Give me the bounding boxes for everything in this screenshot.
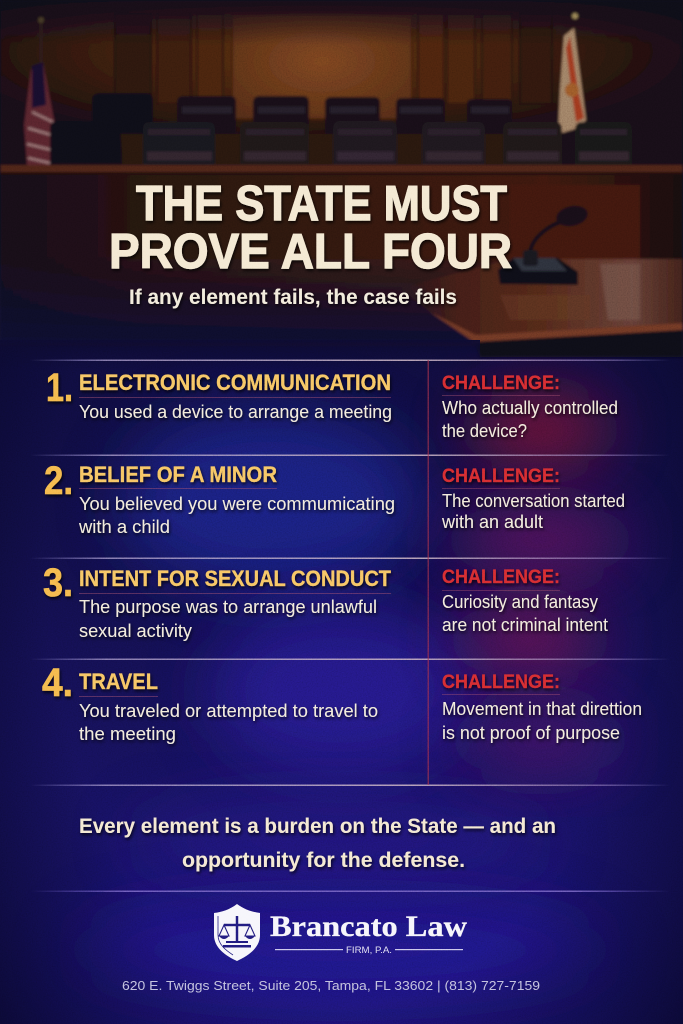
row 3: intent for sexual conduct [43, 561, 391, 641]
blend below photo into navy [0, 340, 480, 370]
row 4 challenge [442, 671, 642, 743]
row 2 challenge: CHALLENGE: [442, 465, 560, 487]
row 3 challenge [442, 566, 608, 635]
firm logo wordmark: Brancato Law [270, 910, 467, 943]
row 2: belief of a minor: 2. [44, 459, 73, 503]
low wood bar behind front chairs [120, 134, 560, 164]
row 2 challenge: with an adult [441, 511, 543, 532]
row 4 challenge: is not proof of purpose [442, 722, 620, 743]
icon: shield with scales [214, 904, 260, 961]
row 4 challenge: CHALLENGE: [442, 671, 560, 693]
courtroom photo illustration [0, 0, 683, 357]
row 3 challenge: CHALLENGE: [442, 566, 560, 588]
row 4: travel: the meeting [79, 723, 176, 744]
row 2: belief of a minor: You believed you were commumicating [79, 493, 395, 514]
row 1 challenge: the device? [442, 420, 527, 441]
row 3 challenge: are not criminal intent [442, 614, 608, 635]
row 1 challenge: Who actually controlled [442, 397, 618, 418]
closing statement [79, 814, 556, 872]
row 3: intent for sexual conduct: The purpose was to arrange unlawful [79, 596, 377, 617]
row 3: intent for sexual conduct: INTENT FOR SEXUAL CONDUCT [79, 566, 391, 591]
row 4: travel [42, 661, 378, 744]
contact address line: 620 E. Twiggs Street, Suite 205, Tampa, FL 33602 | (813) 727-7159 [122, 978, 540, 993]
row 4: travel: 4. [42, 661, 73, 705]
row 2 challenge [441, 465, 625, 532]
row 4 challenge: Movement in that direttion [442, 698, 642, 719]
subtitle: If any element fails, the case fails [129, 286, 457, 309]
jury chairs back row [92, 93, 512, 135]
firm logo wordmark: FIRM, P.A. [346, 945, 392, 956]
title: THE STATE MUST [136, 177, 507, 231]
Florida flag [558, 13, 586, 134]
title: PROVE ALL FOUR [109, 225, 512, 279]
jury chairs front row [50, 121, 632, 168]
row 2 challenge: The conversation started [442, 490, 625, 511]
closing statement: Every element is a burden on the State — and an [79, 814, 556, 838]
row 1: electronic communication [46, 366, 392, 422]
row 2: belief of a minor [44, 459, 395, 537]
microphone on stand [498, 203, 590, 285]
title [109, 177, 512, 279]
jury box rail and lower paneling [0, 165, 683, 345]
row 2: belief of a minor: BELIEF OF A MINOR [79, 462, 277, 487]
row 4: travel: You traveled or attempted to travel to [79, 700, 378, 721]
American flag [24, 17, 55, 165]
row 1 challenge [442, 372, 618, 441]
row 1 challenge: CHALLENGE: [442, 372, 560, 394]
row 1: electronic communication: 1. [46, 366, 73, 410]
row 3 challenge: Curiosity and fantasy [442, 591, 599, 612]
fade into navy [0, 255, 683, 343]
wooden table [400, 259, 683, 357]
row 1: electronic communication: ELECTRONIC COMMUNICATION [79, 370, 391, 395]
wood wall paneling [0, 0, 683, 172]
table dividers [30, 360, 670, 892]
row 3: intent for sexual conduct: sexual activity [79, 620, 193, 641]
row 2: belief of a minor: with a child [78, 516, 170, 537]
closing statement: opportunity for the defense. [182, 848, 465, 872]
row 3: intent for sexual conduct: 3. [43, 561, 73, 605]
firm logo wordmark [270, 910, 467, 956]
row 4: travel: TRAVEL [79, 669, 158, 694]
row 1: electronic communication: You used a device to arrange a meeting [79, 401, 392, 422]
